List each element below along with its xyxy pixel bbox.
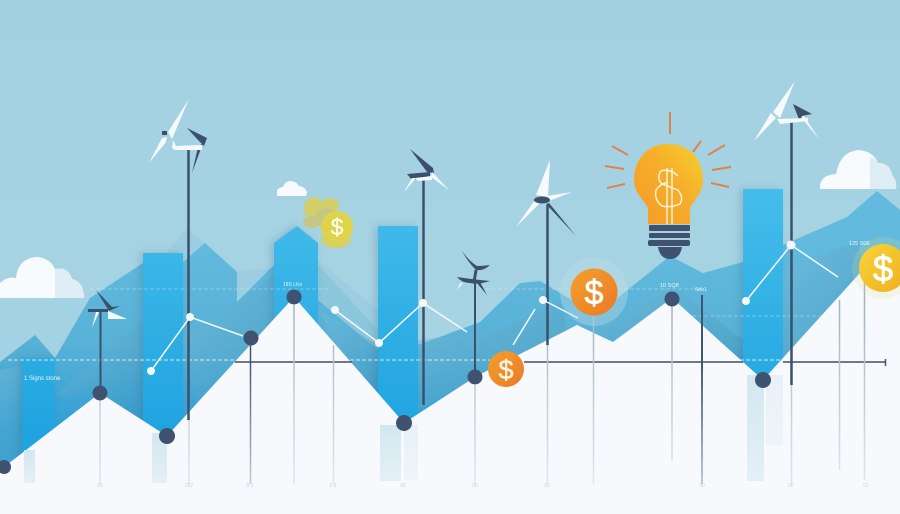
cloud right xyxy=(820,150,896,189)
yellow leafy dollar coin xyxy=(303,197,353,248)
chart labels: 1 Signs stone xyxy=(24,376,61,382)
dark data points xyxy=(0,290,771,474)
orange dollar coin large: $ xyxy=(585,274,604,312)
wind turbine 5 xyxy=(754,81,819,385)
orange dollar coin small: $ xyxy=(498,355,514,385)
horizontal axis xyxy=(235,359,886,366)
white trend lines xyxy=(151,245,838,371)
yellow dollar coin right: $ xyxy=(873,248,893,289)
bar 2 xyxy=(143,253,183,438)
axis tick labels: 01 xyxy=(863,483,869,489)
bulb glass xyxy=(634,144,703,224)
white foreground mountain xyxy=(0,262,900,514)
wind turbine small left xyxy=(88,290,127,393)
bulb rays xyxy=(605,112,731,188)
orange dollar coin small xyxy=(488,351,524,387)
axis tick labels xyxy=(97,483,869,489)
light bulb icon xyxy=(605,112,731,259)
yellow dollar coin right xyxy=(852,237,900,299)
bulb dollar filament xyxy=(656,168,682,224)
axis tick labels: 00 xyxy=(544,483,550,489)
yellow leafy dollar coin: $ xyxy=(331,214,344,240)
cloud left xyxy=(0,257,84,298)
wind turbine 3 xyxy=(457,251,490,380)
chart labels xyxy=(24,241,870,382)
axis tick labels: 202 xyxy=(185,483,193,489)
bar 3 xyxy=(274,226,318,330)
bar 4 xyxy=(378,226,418,431)
bar 1 xyxy=(22,358,55,473)
axis tick labels: 99 xyxy=(97,483,103,489)
axis tick labels: 00 xyxy=(788,483,794,489)
white data points xyxy=(147,240,796,375)
bulb base xyxy=(648,225,690,259)
dashed guide lines in the chart xyxy=(8,289,890,360)
orange dollar coin large xyxy=(560,258,628,326)
wind turbine 2 xyxy=(404,149,449,405)
axis tick labels: 0.8 xyxy=(330,483,337,489)
blue bars xyxy=(22,189,783,473)
bar 5 xyxy=(743,189,783,384)
axis tick labels: 00 xyxy=(699,483,705,489)
chart labels: 6de1 xyxy=(695,287,707,293)
axis tick labels: 00 xyxy=(400,483,406,489)
chart labels: 125 S0E xyxy=(849,241,870,247)
wind turbine 1 xyxy=(149,99,207,420)
axis tick labels: 00 xyxy=(472,483,478,489)
vertical drop lines xyxy=(100,280,864,484)
axis tick labels: 0.1 xyxy=(247,483,254,489)
pale bar reflections xyxy=(24,375,783,483)
cloud small xyxy=(277,181,307,196)
wind turbine 4 xyxy=(516,160,576,345)
chart labels: 10 SQ8 xyxy=(660,283,679,289)
mid blue mountain band xyxy=(0,191,900,480)
chart labels: 18S LKe xyxy=(283,282,302,288)
faded back mountains xyxy=(0,228,500,420)
